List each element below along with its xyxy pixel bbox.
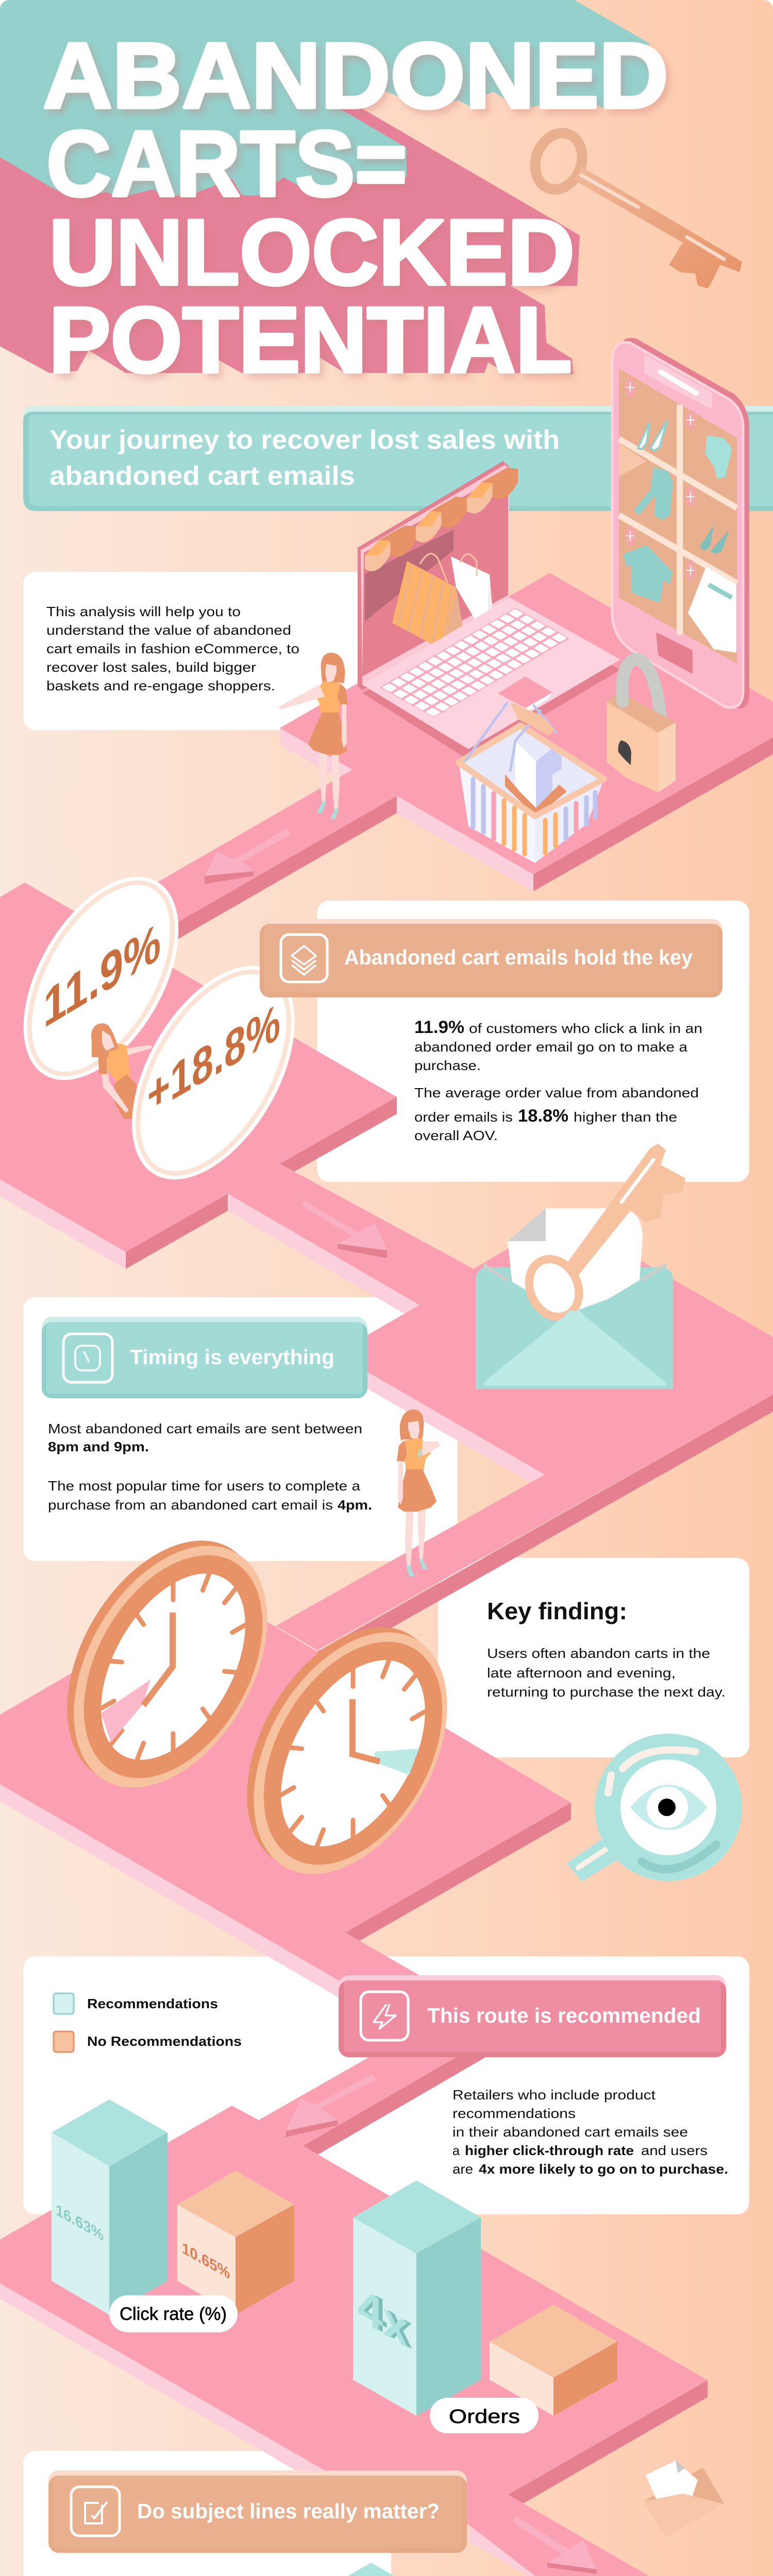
stat ellipse: 11.9%: 11.9% [43,911,161,1040]
text: stats detail: overall AOV. [414,1128,498,1143]
text: recommendations: recommendations [452,2106,576,2121]
legend: recommendations [54,1993,242,2052]
subtitle banner: abandoned cart emails [49,461,355,491]
text: stats detail: 11.9% [414,1018,464,1037]
bar chart: click rate [52,2099,294,2315]
subtitle banner [23,406,773,511]
text: stats detail [414,1018,702,1143]
text: timing [48,1421,372,1513]
banner: timing [42,1317,367,1398]
bar chart: click rate: 16.63% [56,2200,104,2245]
text: timing: 4pm. [338,1497,372,1513]
legend: recommendations: Recommendations [87,1996,218,2011]
text: intro: cart emails in fashion eCommerce, to [46,641,299,656]
bar chart: orders: 4x [362,2278,412,2360]
icon: peach envelope [644,2461,724,2537]
text: key finding: returning to purchase the next day. [487,1684,726,1700]
illustration: envelope with key [476,1144,685,1389]
arrow 1 [205,828,291,884]
icon: orange key [528,126,742,289]
arrow 3 [286,2074,376,2137]
subtitle banner: Your journey to recover lost sales with [49,425,560,455]
text: stats detail: order emails is [414,1109,513,1125]
text: stats detail: abandoned order email go on to make a [414,1039,688,1055]
icon: watch [75,1346,100,1370]
isometric pink route [0,573,773,2576]
text: timing: 8pm and 9pm. [48,1439,149,1454]
illustration: laptop storefront [358,461,620,760]
text: key finding: Users often abandon carts in the [487,1646,710,1661]
label: click rate [109,2295,238,2332]
text: intro: understand the value of abandoned [46,622,291,638]
shopping bags [392,554,493,650]
text: intro: recover lost sales, build bigger [46,659,256,675]
label: orders: Orders [449,2406,520,2428]
illustration: clock one [27,1507,307,1821]
text: timing: The most popular time for users to complete a [48,1478,361,1494]
text: timing: purchase from an abandoned cart email is [48,1497,333,1513]
illustration: shopping basket [459,702,604,863]
text: recommendations: Retailers who include product [452,2087,656,2103]
text: recommendations: higher click-through rate [465,2143,634,2158]
text: intro: baskets and re-engage shoppers. [46,678,275,693]
panel: intro card [23,572,374,730]
banner: abandoned cart emails: Abandoned cart emails hold the key [344,945,693,969]
illustration: clock two [207,1594,487,1908]
icon: magnifying glass with eye [567,1734,742,1882]
arrow 4 [513,2516,597,2574]
text: recommendations: and users [641,2143,708,2158]
panel: subject lines card [23,2451,391,2576]
label: orders [430,2398,539,2433]
panel: key finding card [438,1558,749,1757]
text: recommendations: in their abandoned cart emails see [452,2124,688,2140]
header diagonal bands [0,0,650,374]
text: recommendations: 4x more likely to go on to purchase. [479,2161,728,2177]
text: intro [46,604,299,693]
text: stats detail: 18.8% [518,1106,568,1126]
text: key finding: Key finding: [487,1598,627,1624]
awning [365,468,518,571]
text: stats detail: The average order value from abandoned [414,1085,699,1100]
stat ellipse: +18.8% [100,940,327,1206]
phone products [624,377,736,653]
text: key finding [487,1598,726,1700]
stat ellipse: 11.9% [0,852,209,1105]
text: key finding: late afternoon and evening, [487,1665,676,1681]
text: stats detail: higher than the [574,1109,677,1125]
title [43,24,668,392]
banner: abandoned cart emails [260,919,722,997]
title: UNLOCKED [49,200,575,304]
legend: recommendations: No Recommendations [87,2033,242,2049]
bar chart: subject line open rate [284,2563,644,2576]
icon: layers [292,946,316,975]
banner: subject lines: Do subject lines really matter? [137,2499,440,2523]
panel: recommendations card [23,1956,749,2214]
banner: route recommended: This route is recommended [427,2004,701,2027]
panel: timing card [23,1297,458,1561]
text: intro: This analysis will help you to [46,604,241,619]
stat ellipse: +18.8%: +18.8% [147,992,280,1125]
illustration: girl checking watch [397,1410,441,1576]
text: stats detail: of customers who click a link in an [469,1021,702,1036]
banner: route recommended [339,1975,726,2057]
text: recommendations: are [452,2161,473,2177]
text: stats detail: purchase. [414,1058,481,1073]
panel: abandoned cart emails card [317,901,749,1182]
bar chart: orders [353,2180,617,2416]
icon: lightning bolt [374,2004,396,2029]
banner: subject lines [48,2470,467,2553]
banner: timing: Timing is everything [130,1345,334,1369]
text: timing: Most abandoned cart emails are sent between [48,1421,362,1436]
label: click rate: Click rate (%) [120,2304,227,2324]
bar chart: click rate: 10.65% [182,2239,230,2283]
title: ABANDONED [43,24,668,128]
arrow 2 [301,1200,387,1258]
text: recommendations: a [452,2143,460,2158]
icon: edit checkbox [85,2502,107,2523]
icon: padlock [607,659,676,792]
illustration: smartphone [612,338,749,708]
illustration: girl between stats [91,1023,153,1119]
text: recommendations [452,2087,728,2177]
bar chart: orders: 4x [358,2277,408,2359]
title: POTENTIAL [49,288,572,392]
title: CARTS= [46,112,407,216]
illustration: girl pointing [278,653,348,819]
